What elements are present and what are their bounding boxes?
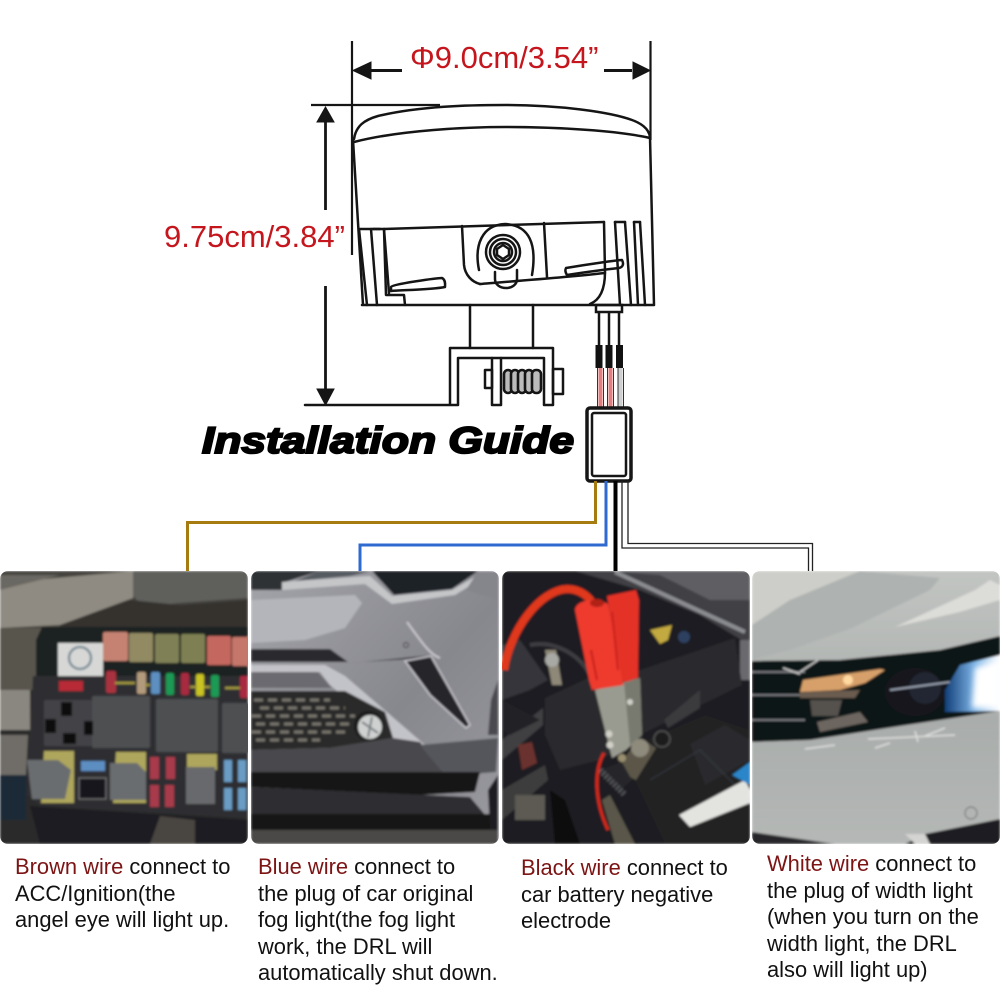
- lower grille: [251, 691, 393, 750]
- red thin wire: [597, 753, 608, 830]
- large fuses: [103, 632, 128, 661]
- caption: brown wire: connect to: [123, 854, 230, 879]
- photo: battery clamp: [502, 571, 750, 844]
- battery: [630, 715, 750, 844]
- caption: black wire: Black wire: [521, 855, 621, 880]
- mounting bracket: [305, 305, 563, 405]
- photo: fuse box: [0, 571, 252, 844]
- scratches: [805, 728, 955, 749]
- headlight: [251, 571, 320, 590]
- terminal: [622, 742, 657, 781]
- tyre: [488, 775, 498, 830]
- grille stripes: [752, 672, 805, 720]
- caption: white wire: also will light up): [767, 957, 928, 982]
- spring: [504, 370, 541, 393]
- caption: brown wire: ACC/Ignition(the: [15, 881, 176, 906]
- black wire: [614, 481, 618, 571]
- top right body: [468, 574, 485, 588]
- lower bumper: [251, 738, 446, 775]
- fog lamp: [355, 712, 383, 740]
- control box: [587, 408, 631, 481]
- white block: [58, 643, 103, 676]
- crease highlights: [407, 622, 440, 658]
- white beam: [945, 655, 1000, 712]
- small fuses: [106, 671, 116, 693]
- caption: brown wire: Brown wire: [15, 854, 123, 879]
- metal clamp: [595, 678, 642, 758]
- caption: white wire: connect to: [869, 851, 976, 876]
- caption: white wire: (when you turn on the: [767, 904, 979, 929]
- red clamp handles: [607, 590, 639, 682]
- caption: blue wire: automatically shut down.: [258, 960, 498, 985]
- black battery cover: [545, 638, 742, 770]
- width label: Φ9.0cm/3.54”: [410, 40, 598, 75]
- socket: [44, 700, 92, 746]
- caption: blue wire: the plug of car original: [258, 881, 473, 906]
- hood patch: [251, 595, 362, 643]
- photo: fog light: [251, 571, 499, 844]
- silver strip: [251, 665, 425, 745]
- under bumper and road: [251, 772, 480, 795]
- caption: black wire: connect to: [621, 855, 728, 880]
- engine parts: [650, 625, 672, 644]
- left hoses: [502, 708, 543, 760]
- amber DRL: [800, 669, 885, 692]
- caption: blue wire: connect to: [348, 854, 455, 879]
- blue wire: [360, 481, 606, 571]
- wire collar: [596, 305, 622, 312]
- lower bumper: [752, 832, 835, 844]
- hood: [575, 571, 750, 645]
- title: Installation Guide: [202, 420, 574, 461]
- connector wires and control box: [587, 305, 631, 481]
- battery labels: [679, 780, 750, 827]
- lamp technical drawing: [305, 105, 654, 405]
- hoses: [0, 571, 133, 628]
- height label: 9.75cm/3.84”: [164, 219, 345, 254]
- vent: [405, 656, 470, 728]
- caption: blue wire: work, the DRL will: [257, 934, 432, 959]
- caption: black wire: electrode: [521, 908, 611, 933]
- caption: white wire: the plug of width light: [767, 878, 973, 903]
- relays: [92, 696, 150, 748]
- lamp housing: [353, 105, 654, 305]
- caption: brown wire: angel eye will light up.: [15, 907, 229, 932]
- lower fuses: [150, 757, 159, 779]
- yellow latches: [41, 751, 74, 803]
- brown wire: [188, 481, 596, 571]
- red cable: [504, 589, 594, 670]
- caption: white wire: White wire: [767, 851, 869, 876]
- white wire: [622, 481, 812, 571]
- fuse box body: [36, 627, 248, 676]
- caption: blue wire: Blue wire: [258, 854, 348, 879]
- upper grille slot: [251, 649, 348, 662]
- photo: headlight: [752, 571, 1000, 844]
- caption: black wire: car battery negative: [521, 882, 713, 907]
- caption: blue wire: fog light(the fog light: [258, 907, 455, 932]
- width dimension arrow: [352, 41, 650, 255]
- headlight band: [752, 636, 1000, 742]
- indicator detail: [810, 700, 842, 716]
- height dimension arrow: [311, 105, 440, 405]
- caption: white wire: width light, the DRL: [766, 931, 957, 956]
- projector lens: [885, 668, 945, 716]
- sensor: [965, 807, 977, 819]
